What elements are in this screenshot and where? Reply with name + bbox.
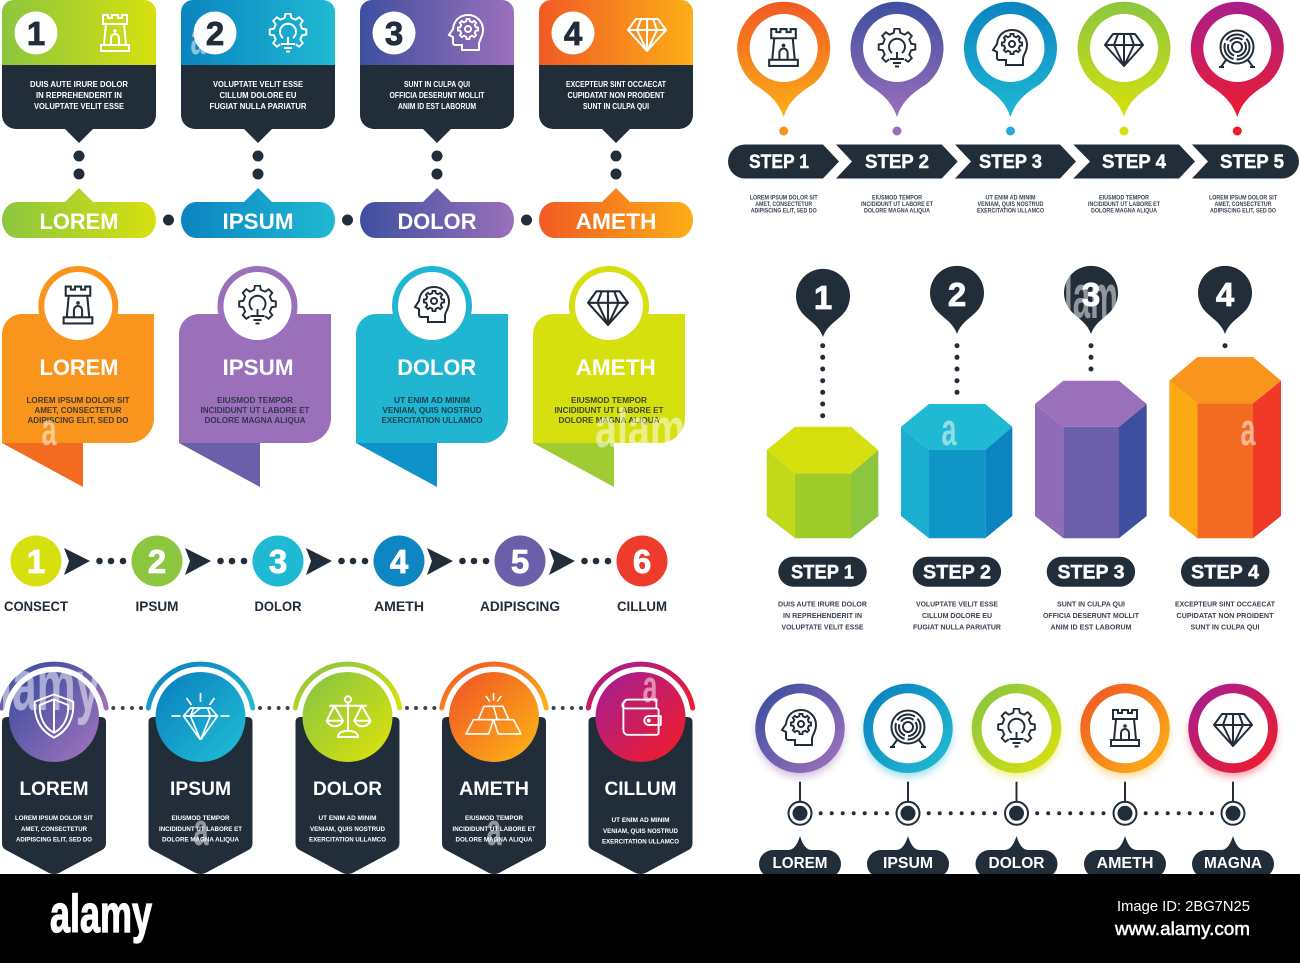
- step 3 arrow: EXERCITATION ULLAMCO: [977, 208, 1044, 214]
- step 5 arrow: ADIPISCING ELIT, SED DO: [1210, 208, 1276, 214]
- watermark overlays: a: [642, 661, 658, 712]
- node 1: [4, 536, 68, 614]
- panel: map pin steps: [728, 2, 1299, 214]
- prism step 3: STEP 3: [1058, 562, 1124, 584]
- ring ipsum: [863, 684, 953, 878]
- badge card lorem: [2, 664, 106, 874]
- ribbon card ipsum: EIUSMOD TEMPOR: [217, 395, 294, 405]
- badge card ameth: AMETH: [459, 779, 529, 800]
- panel: numbered bubble cards: [2, 0, 693, 238]
- step 5 arrow: LOREM IPSUM DOLOR SIT: [1209, 194, 1277, 202]
- badge card cillum: [588, 664, 693, 874]
- node 3: [252, 536, 304, 614]
- card 2: FUGIAT NULLA PARIATUR: [210, 102, 307, 111]
- badge card lorem: LOREM IPSUM DOLOR SIT: [15, 815, 94, 822]
- step 3 arrow: STEP 3: [979, 152, 1042, 173]
- ribbon card lorem: [2, 266, 154, 487]
- step 5 arrow: [1192, 144, 1299, 214]
- step 5 arrow: STEP 5: [1220, 152, 1284, 173]
- node 6: 6: [633, 543, 651, 580]
- badge card dolor: DOLOR: [313, 779, 382, 800]
- ring lorem: [755, 684, 845, 878]
- step 2 arrow: STEP 2: [865, 152, 929, 173]
- prism step 3: 3: [1082, 276, 1100, 313]
- badge card ipsum: IPSUM: [170, 779, 231, 800]
- badge card ameth: [442, 664, 546, 874]
- ribbon card ipsum: [179, 266, 331, 487]
- card 3: DOLOR: [398, 209, 477, 234]
- watermark overlays: a: [190, 13, 206, 64]
- website: www.alamy.com: [1114, 919, 1250, 939]
- prism step 2: 2: [948, 276, 966, 313]
- node 5: [480, 536, 560, 614]
- prism step 2: STEP 2: [923, 562, 991, 584]
- card 3: 3: [385, 15, 403, 52]
- connector dots: [163, 214, 532, 226]
- prism step 3: OFFICIA DESERUNT MOLLIT: [1043, 611, 1139, 620]
- prism step 1: STEP 1: [791, 562, 854, 584]
- footer bar: [0, 874, 1300, 963]
- prism step 1: DUIS AUTE IRURE DOLOR: [778, 600, 867, 608]
- ribbon card dolor: VENIAM, QUIS NOSTRUD: [382, 405, 482, 415]
- panel: hexagonal prism bar chart: [767, 266, 1281, 632]
- ring lorem: LOREM: [772, 855, 828, 872]
- step 4 arrow: DOLORE MAGNA ALIQUA: [1091, 208, 1157, 214]
- card 3: OFFICIA DESERUNT MOLLIT: [390, 91, 485, 100]
- ribbon card lorem: AMET, CONSECTETUR: [34, 405, 122, 415]
- arrow 3: [306, 548, 368, 575]
- badge card cillum: VENIAM, QUIS NOSTRUD: [603, 828, 678, 835]
- prism step 1: VOLUPTATE VELIT ESSE: [782, 622, 864, 632]
- prism step 4: 4: [1216, 276, 1235, 313]
- ribbon card ipsum: DOLORE MAGNA ALIQUA: [204, 415, 306, 425]
- ribbon card ameth: INCIDIDUNT UT LABORE ET: [554, 405, 664, 415]
- badge card cillum: UT ENIM AD MINIM: [612, 817, 670, 824]
- node 4: [374, 536, 424, 614]
- ribbon card lorem: LOREM: [40, 355, 118, 380]
- ring ameth: AMETH: [1096, 855, 1154, 872]
- step 2 arrow: DOLORE MAGNA ALIQUA: [864, 208, 930, 214]
- prism step 1: IN REPREHENDERIT IN: [783, 611, 862, 620]
- card 1: VOLUPTATE VELIT ESSE: [34, 102, 125, 111]
- node 1: 1: [27, 543, 45, 580]
- node 5: ADIPISCING: [480, 598, 560, 614]
- node 5: 5: [511, 543, 529, 580]
- prism step 4: EXCEPTEUR SINT OCCAECAT: [1175, 600, 1275, 608]
- watermark overlays: a: [1240, 404, 1256, 455]
- panel: shield-shaped cards with round badges: [2, 664, 693, 874]
- ring dolor: DOLOR: [988, 855, 1045, 872]
- badge card dolor: UT ENIM AD MINIM: [318, 815, 377, 822]
- watermark overlays: lamy: [0, 646, 100, 726]
- panel: ribbon cards: [2, 266, 685, 487]
- ribbon card dolor: [356, 266, 508, 487]
- ribbon card ameth: DOLORE MAGNA ALIQUA: [558, 415, 660, 425]
- card 4: AMETH: [576, 209, 656, 234]
- card 1: 1: [27, 15, 45, 52]
- pin 5: [1191, 2, 1284, 135]
- arrow 5: [549, 548, 611, 575]
- pin 1: [737, 2, 830, 135]
- card 3: ANIM ID EST LABORUM: [398, 102, 476, 111]
- card 2: IPSUM: [222, 209, 294, 234]
- card 2: 2: [206, 15, 224, 52]
- card 4: [539, 0, 693, 238]
- step 4 arrow: STEP 4: [1102, 152, 1166, 173]
- badge card lorem: LOREM: [20, 779, 88, 800]
- card 1: DUIS AUTE IRURE DOLOR: [30, 80, 128, 89]
- logo: alamy: [50, 885, 152, 944]
- panel: ring icon timeline: [755, 684, 1278, 878]
- card 1: [2, 0, 156, 238]
- prism step 4: [1169, 266, 1281, 632]
- ribbon card ameth: [533, 266, 685, 487]
- prism step 2: CILLUM DOLORE EU: [922, 611, 992, 620]
- pin 4: [1078, 2, 1170, 135]
- pin 3: [964, 2, 1057, 135]
- node 2: IPSUM: [136, 598, 178, 614]
- card 4: SUNT IN CULPA QUI: [583, 102, 649, 111]
- arrow 4: [427, 548, 489, 575]
- step 1 arrow: AMET, CONSECTETUR: [755, 201, 812, 208]
- prism step 4: CUPIDATAT NON PROIDENT: [1176, 611, 1274, 620]
- badge card ipsum: INCIDIDUNT UT LABORE ET: [159, 826, 243, 833]
- prism step 1: 1: [814, 279, 832, 316]
- ring dolor: [972, 684, 1061, 878]
- ribbon card dolor: DOLOR: [397, 355, 476, 380]
- prism step 1: [767, 269, 878, 632]
- step 2 arrow: EIUSMOD TEMPOR: [872, 194, 922, 202]
- card 3: SUNT IN CULPA QUI: [404, 80, 470, 89]
- card 1: IN REPREHENDERIT IN: [36, 91, 122, 100]
- step 3 arrow: VENIAM, QUIS NOSTRUD: [978, 201, 1044, 208]
- node 4: 4: [390, 543, 409, 580]
- node 1: CONSECT: [4, 598, 68, 614]
- card 2: CILLUM DOLORE EU: [220, 91, 297, 100]
- ribbon card lorem: LOREM IPSUM DOLOR SIT: [26, 395, 130, 405]
- image id: Image ID: 2BG7N25: [1117, 898, 1250, 915]
- badge card ameth: DOLORE MAGNA ALIQUA: [456, 836, 533, 844]
- prism step 4: SUNT IN CULPA QUI: [1190, 622, 1260, 632]
- prism step 2: FUGIAT NULLA PARIATUR: [913, 622, 1001, 632]
- timeline dots: [819, 811, 1214, 815]
- step 1 arrow: LOREM IPSUM DOLOR SIT: [750, 194, 818, 202]
- node 3: DOLOR: [254, 598, 302, 614]
- card 2: VOLUPTATE VELIT ESSE: [213, 80, 304, 89]
- card 4: CUPIDATAT NON PROIDENT: [568, 91, 665, 100]
- ring magna: [1188, 684, 1278, 878]
- step 1 arrow: ADIPISCING ELIT, SED DO: [751, 208, 817, 214]
- ribbon card ipsum: INCIDIDUNT UT LABORE ET: [200, 405, 310, 415]
- watermark overlays: a: [194, 804, 209, 855]
- prism step 3: SUNT IN CULPA QUI: [1057, 600, 1125, 608]
- card 4: 4: [564, 15, 583, 52]
- badge card cillum: CILLUM: [604, 779, 676, 800]
- step 2 arrow: [836, 144, 958, 214]
- ribbon card dolor: UT ENIM AD MINIM: [394, 395, 470, 405]
- step 2 arrow: INCIDIDUNT UT LABORE ET: [861, 201, 933, 208]
- pin 2: [850, 2, 943, 135]
- badge card ameth: INCIDIDUNT UT LABORE ET: [452, 826, 536, 833]
- step 3 arrow: UT ENIM AD MINIM: [986, 194, 1036, 202]
- watermark overlays: a: [486, 804, 502, 855]
- ribbon card ameth: AMETH: [576, 355, 656, 380]
- step 4 arrow: [1073, 144, 1195, 214]
- connector dots: [111, 706, 583, 710]
- node 3: 3: [269, 543, 287, 580]
- watermark overlays: alam: [595, 397, 685, 459]
- watermark overlays: a: [942, 404, 957, 455]
- card 4: EXCEPTEUR SINT OCCAECAT: [566, 80, 666, 89]
- badge card dolor: VENIAM, QUIS NOSTRUD: [310, 826, 385, 833]
- step 4 arrow: INCIDIDUNT UT LABORE ET: [1088, 201, 1160, 208]
- watermark overlays: lam: [1064, 263, 1118, 332]
- step 1 arrow: STEP 1: [749, 152, 809, 173]
- card 1: LOREM: [40, 209, 118, 234]
- step 3 arrow: [955, 144, 1076, 214]
- step 4 arrow: EIUSMOD TEMPOR: [1099, 194, 1149, 202]
- badge card dolor: [295, 664, 400, 874]
- ribbon card ipsum: IPSUM: [222, 355, 294, 380]
- ring ameth: [1080, 684, 1170, 878]
- panel: numbered arrow timeline: [4, 536, 668, 614]
- watermark overlays: a: [42, 404, 57, 455]
- prism step 2: [901, 266, 1012, 632]
- ribbon card ameth: EIUSMOD TEMPOR: [571, 395, 648, 405]
- node 6: CILLUM: [617, 598, 667, 614]
- badge card lorem: AMET, CONSECTETUR: [21, 826, 87, 833]
- badge card ipsum: EIUSMOD TEMPOR: [172, 815, 230, 822]
- ribbon card dolor: EXERCITATION ULLAMCO: [382, 415, 483, 425]
- prism step 3: [1035, 266, 1147, 632]
- badge card dolor: EXERCITATION ULLAMCO: [309, 836, 386, 844]
- badge card ipsum: DOLORE MAGNA ALIQUA: [162, 836, 239, 844]
- step 1 arrow: [728, 144, 839, 214]
- card 2: [181, 0, 335, 238]
- step 5 arrow: AMET, CONSECTETUR: [1214, 201, 1272, 208]
- ring ipsum: IPSUM: [883, 855, 933, 872]
- arrow 2: [185, 548, 247, 575]
- prism step 3: ANIM ID EST LABORUM: [1050, 622, 1132, 632]
- prism step 4: STEP 4: [1191, 562, 1259, 584]
- badge card ameth: EIUSMOD TEMPOR: [465, 815, 523, 822]
- ribbon card lorem: ADIPISCING ELIT, SED DO: [28, 415, 129, 425]
- ring magna: MAGNA: [1204, 855, 1262, 872]
- arrow 1: [64, 548, 126, 575]
- card 3: [360, 0, 514, 238]
- badge card cillum: EXERCITATION ULLAMCO: [602, 838, 679, 846]
- node 6: [616, 536, 668, 614]
- node 4: AMETH: [374, 598, 424, 614]
- node 2: [132, 536, 182, 614]
- badge card ipsum: [148, 664, 253, 874]
- prism step 2: VOLUPTATE VELIT ESSE: [916, 600, 998, 608]
- badge card lorem: ADIPISCING ELIT, SED DO: [16, 836, 92, 844]
- node 2: 2: [148, 543, 166, 580]
